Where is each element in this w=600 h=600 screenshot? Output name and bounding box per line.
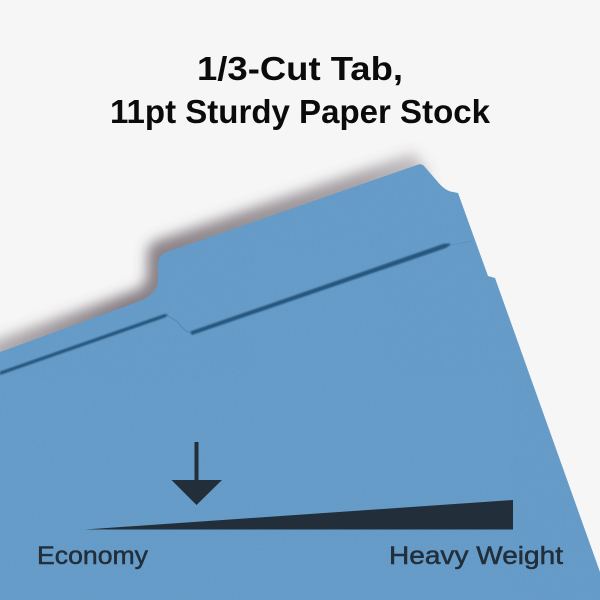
blue file folder [0, 164, 600, 600]
right slot crease [190, 244, 451, 335]
title: 11pt Sturdy Paper Stock [110, 93, 491, 130]
faint crease to the right edge [451, 241, 472, 245]
left slot crease [0, 314, 168, 375]
title [110, 50, 491, 130]
weight scale wedge [85, 500, 513, 530]
folder shadow [0, 153, 428, 400]
label: Economy: Economy [37, 542, 149, 570]
folder body with tab [0, 164, 600, 600]
title: 1/3-Cut Tab, [197, 50, 403, 87]
label: Heavy Weight: Heavy Weight [389, 542, 563, 570]
icon: down arrow marking weight position [172, 442, 222, 505]
tab fold edge [168, 316, 190, 333]
